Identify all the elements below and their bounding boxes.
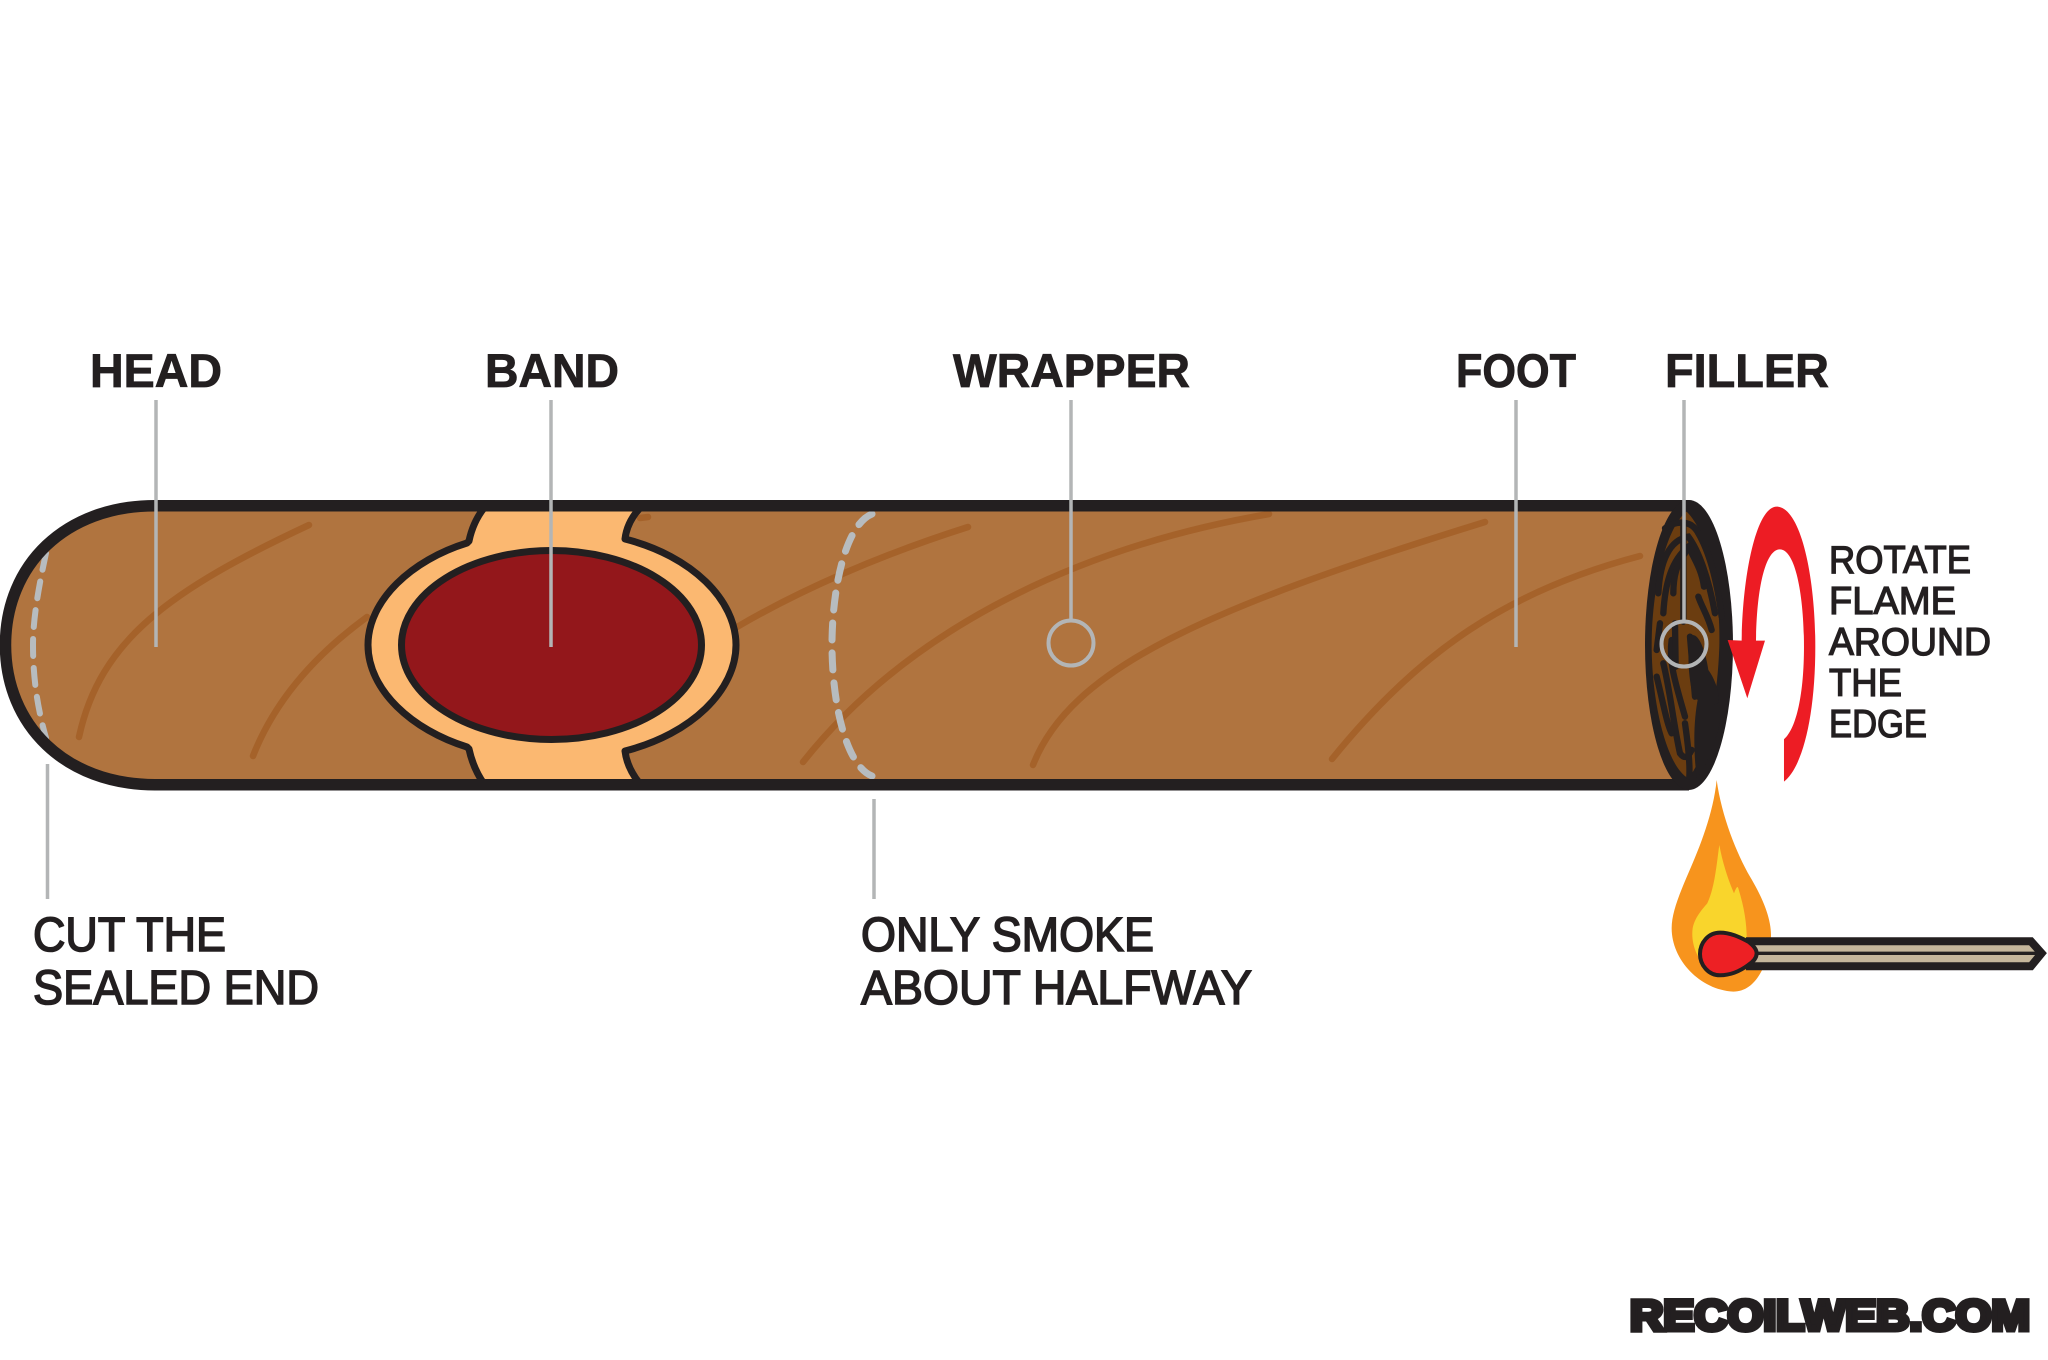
match centre line bbox=[1750, 948, 2040, 958]
flame outer bbox=[1672, 780, 1771, 992]
leader: cut the sealed end bbox=[46, 764, 49, 899]
label: HEAD: HEAD bbox=[90, 344, 222, 397]
arrow: rotate flame bbox=[1728, 507, 1815, 782]
match stick bbox=[1750, 941, 2042, 966]
flame inner bbox=[1692, 845, 1747, 970]
note: only smoke about halfway: ABOUT HALFWAY bbox=[861, 962, 1252, 1015]
note: rotate flame around the edge: EDGE bbox=[1829, 703, 1927, 746]
leader: FOOT bbox=[1514, 400, 1518, 647]
leader: FILLER with circle bbox=[1662, 400, 1706, 666]
filler at foot bbox=[1645, 500, 1733, 790]
dashed halfway line bbox=[832, 514, 872, 776]
wrapper veins bbox=[79, 514, 1640, 765]
note: only smoke about halfway: ONLY SMOKE bbox=[861, 909, 1154, 962]
note: rotate flame around the edge: ROTATE bbox=[1829, 539, 1971, 582]
note: cut the sealed end bbox=[33, 909, 319, 1015]
match head bbox=[1700, 933, 1757, 975]
leader: WRAPPER with circle bbox=[1048, 400, 1094, 666]
cigar outline bbox=[6, 506, 1689, 785]
note: cut the sealed end: CUT THE bbox=[33, 909, 226, 962]
note: rotate flame around the edge: FLAME bbox=[1829, 580, 1956, 623]
filler brown core bbox=[1652, 512, 1719, 778]
cigar illustration bbox=[6, 500, 1733, 790]
note: rotate flame around the edge: THE bbox=[1829, 662, 1902, 705]
dashed cut line at head bbox=[33, 553, 46, 738]
icon: burning match bbox=[1672, 780, 2042, 992]
filler dark mass bbox=[1688, 635, 1721, 778]
note: rotate flame around the edge bbox=[1829, 539, 1991, 746]
filler dark end bbox=[1645, 500, 1733, 790]
filler grain strokes bbox=[1657, 523, 1722, 777]
band outer shape bbox=[368, 508, 736, 784]
leader: only smoke about halfway bbox=[872, 799, 876, 899]
label: FOOT: FOOT bbox=[1456, 344, 1576, 397]
band red seal bbox=[402, 550, 702, 740]
leader: BAND bbox=[549, 400, 553, 647]
note: only smoke about halfway bbox=[861, 909, 1252, 1015]
label: BAND: BAND bbox=[485, 344, 619, 397]
label: FILLER: FILLER bbox=[1665, 344, 1829, 397]
leader: HEAD bbox=[154, 400, 158, 647]
note: cut the sealed end: SEALED END bbox=[33, 962, 319, 1015]
note: rotate flame around the edge: AROUND bbox=[1829, 621, 1991, 664]
cigar band bbox=[368, 508, 736, 784]
logo: recoilweb.com: RECOILWEB.COM bbox=[1630, 1292, 2030, 1340]
cigar body wrapper fill bbox=[6, 506, 1689, 785]
label: WRAPPER: WRAPPER bbox=[953, 344, 1190, 397]
